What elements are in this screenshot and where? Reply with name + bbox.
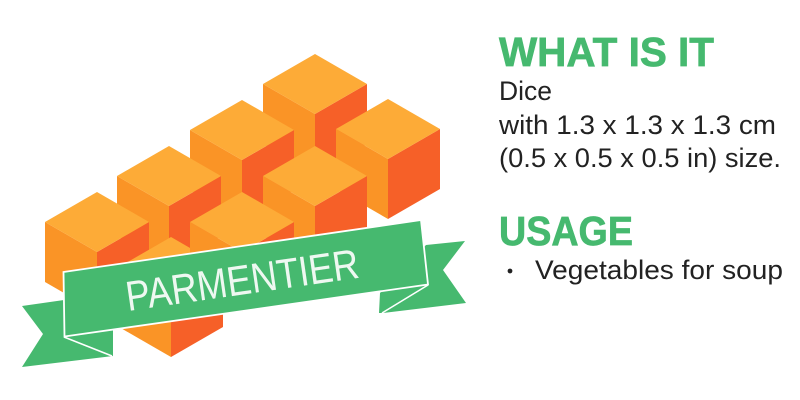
cube 7 (119, 237, 223, 357)
illustration: stacked diced cubes (45, 54, 440, 357)
usage list item: Vegetables for soup (535, 255, 783, 285)
description text (498, 76, 781, 173)
ribbon banner (22, 220, 466, 367)
ribbon label: PARMENTIER (123, 240, 362, 320)
cube 5 (336, 99, 440, 219)
ribbon right tail (379, 241, 466, 313)
cube 6 (263, 146, 367, 266)
ribbon main band (64, 220, 428, 336)
description text: with 1.3 x 1.3 x 1.3 cm (498, 110, 776, 140)
heading: what is it: WHAT IS IT (499, 29, 714, 75)
cube 1 (263, 54, 367, 174)
ribbon left tail (22, 300, 113, 367)
description text: Dice (499, 76, 552, 106)
cube 4 (45, 192, 149, 312)
description text: (0.5 x 0.5 x 0.5 in) size. (499, 143, 781, 173)
cube 3 (117, 146, 221, 266)
heading: usage: USAGE (499, 208, 633, 254)
cube 2 (190, 100, 294, 220)
cube 8 (190, 192, 294, 312)
